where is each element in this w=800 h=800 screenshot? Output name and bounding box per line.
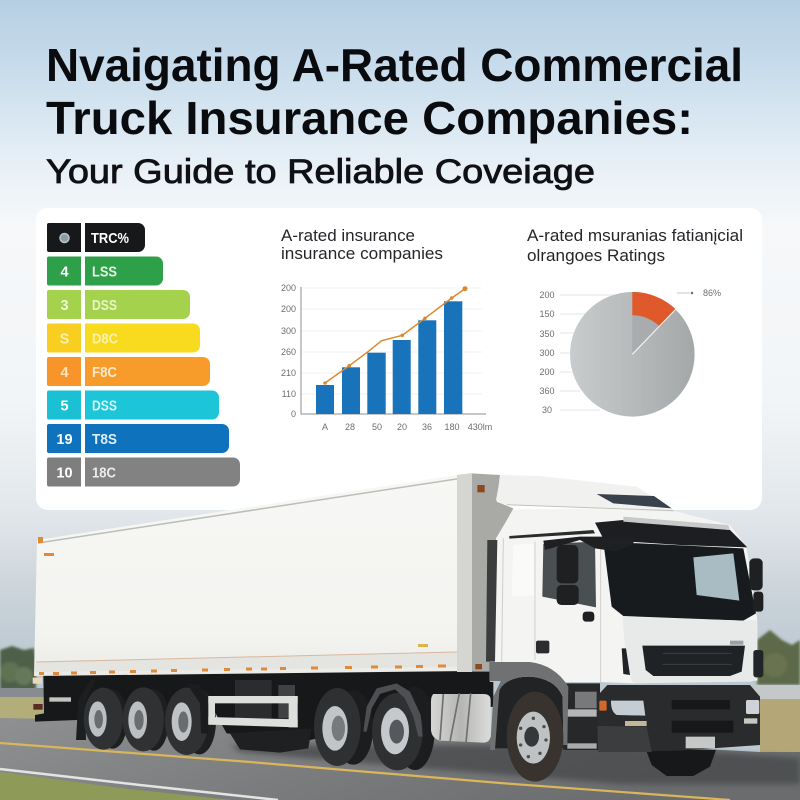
- y axis labels: [281, 283, 296, 419]
- pie left labels: 360: [539, 386, 555, 396]
- pie left labels: 30: [542, 405, 552, 415]
- x axis labels: 430lm: [468, 422, 492, 432]
- cab body: [490, 508, 757, 683]
- trend line: [323, 286, 468, 385]
- x axis labels: [322, 422, 492, 432]
- rating row 2: 4: [60, 264, 69, 280]
- pie left labels: [539, 290, 555, 415]
- trailer roof rail: [38, 478, 463, 543]
- bumper details: [625, 700, 759, 748]
- bar chart heading: A-rated insurance: [281, 226, 415, 245]
- title: [46, 39, 743, 144]
- trailer marker lights: [38, 537, 446, 675]
- pie chart heading: A-rated msuranias fatianįcial: [527, 226, 743, 245]
- panel: bar chart: [281, 226, 492, 432]
- step well: [563, 683, 600, 750]
- rating row 1: TRC%: [91, 231, 129, 247]
- door lines: [502, 538, 601, 682]
- x axis labels: 28: [345, 422, 355, 432]
- pie left labels: 350: [539, 329, 555, 339]
- fuel tank: [431, 693, 491, 743]
- trailer lower stripe: [35, 652, 457, 672]
- side slat: [486, 540, 497, 662]
- title: Truck Insurance Companies:: [46, 92, 693, 144]
- x axis labels: A: [322, 422, 328, 432]
- tractor cab: [472, 473, 763, 782]
- roof strip: [509, 530, 595, 539]
- rating row 4: [47, 324, 200, 352]
- road: [0, 718, 800, 800]
- step plates: [567, 692, 597, 749]
- y axis labels: 200: [281, 283, 296, 293]
- rating row 5: F8C: [92, 365, 117, 381]
- pie slice: inner grey: [632, 315, 660, 354]
- x axis labels: 50: [372, 422, 382, 432]
- rating row 7: 19: [56, 432, 73, 448]
- pie leader lines: [560, 295, 632, 410]
- bar chart heading: [281, 226, 443, 263]
- pie left labels: 200: [539, 290, 555, 300]
- rating row 5: 4: [60, 365, 69, 381]
- bulkhead lamps: [475, 485, 485, 669]
- trailer box: [34, 474, 472, 676]
- rating row 1: [47, 223, 145, 252]
- subtitle: Your Guide to Reliable Coveiage: [46, 153, 595, 191]
- front axle shadow: [646, 750, 716, 776]
- rating row 3: 3: [60, 298, 69, 314]
- y axis labels: 260: [281, 347, 296, 357]
- pie chart heading: olrangoes Ratings: [527, 246, 665, 265]
- rating row 6: 5: [60, 398, 69, 414]
- headlamp left: [611, 701, 645, 716]
- rating row 7: T8S: [92, 432, 117, 448]
- pie chart heading: [527, 226, 743, 265]
- side mirrors: [543, 537, 763, 622]
- rating row 8: 10: [56, 466, 73, 482]
- y axis labels: 210: [281, 368, 296, 378]
- rating row 2: LSS: [92, 264, 117, 280]
- rating row 4: D8C: [92, 332, 118, 348]
- rating row 6: DSS: [92, 398, 117, 414]
- rating row 8: 18C: [92, 466, 116, 482]
- side underrun guard: [208, 696, 298, 727]
- roof fairing: [496, 475, 674, 510]
- rating row 7: [47, 424, 229, 453]
- rating row 3: DSS: [92, 298, 117, 314]
- trailer undercarriage: [33, 670, 493, 770]
- pie callout: [677, 288, 721, 298]
- y axis labels: 300: [281, 326, 296, 336]
- x axis labels: 36: [422, 422, 432, 432]
- sun visor: [595, 520, 747, 547]
- rating row 4: S: [60, 332, 70, 348]
- pie left labels: 200: [539, 367, 555, 377]
- trailer front corner post: [457, 473, 472, 672]
- title: Nvaigating A-Rated Commercial: [46, 39, 743, 91]
- rating row 5: [47, 357, 210, 386]
- windscreen: [603, 542, 756, 621]
- indicator: [599, 701, 607, 711]
- x axis labels: 20: [397, 422, 407, 432]
- trailer wheels: [84, 683, 435, 770]
- pie disc: [570, 292, 695, 417]
- bumper: [597, 685, 760, 752]
- y axis labels: 200: [281, 304, 296, 314]
- front wheel: [507, 692, 563, 782]
- pie left labels: 150: [539, 309, 555, 319]
- panel: white data card: [36, 208, 762, 510]
- bar chart heading: insurance companies: [281, 244, 443, 263]
- bars: [316, 301, 462, 414]
- roof vent: [597, 494, 672, 508]
- grille: [642, 641, 745, 676]
- panel: ratings ladder: [47, 223, 240, 486]
- pie callout: 86%: [703, 288, 721, 298]
- side window: [542, 542, 596, 607]
- rating row 6: [47, 390, 219, 420]
- truck: [33, 473, 763, 782]
- pie slice: orange: [632, 292, 676, 327]
- background: roadside scenery: [0, 630, 800, 752]
- bulkhead: [472, 473, 513, 672]
- y axis labels: 0: [291, 409, 296, 419]
- wheel arch trim: [489, 662, 568, 750]
- rating row 2: [47, 256, 163, 286]
- front fascia: [623, 617, 757, 683]
- rating row 8: [47, 458, 240, 486]
- y axis labels: 110: [282, 389, 296, 399]
- wheel arch interior: [493, 677, 563, 748]
- pie left labels: 300: [539, 348, 555, 358]
- panel: pie chart: [527, 226, 743, 417]
- bar chart axes: [301, 287, 486, 414]
- rating row 3: [47, 290, 190, 319]
- pie separator: [632, 308, 677, 354]
- x axis labels: 180: [444, 422, 460, 432]
